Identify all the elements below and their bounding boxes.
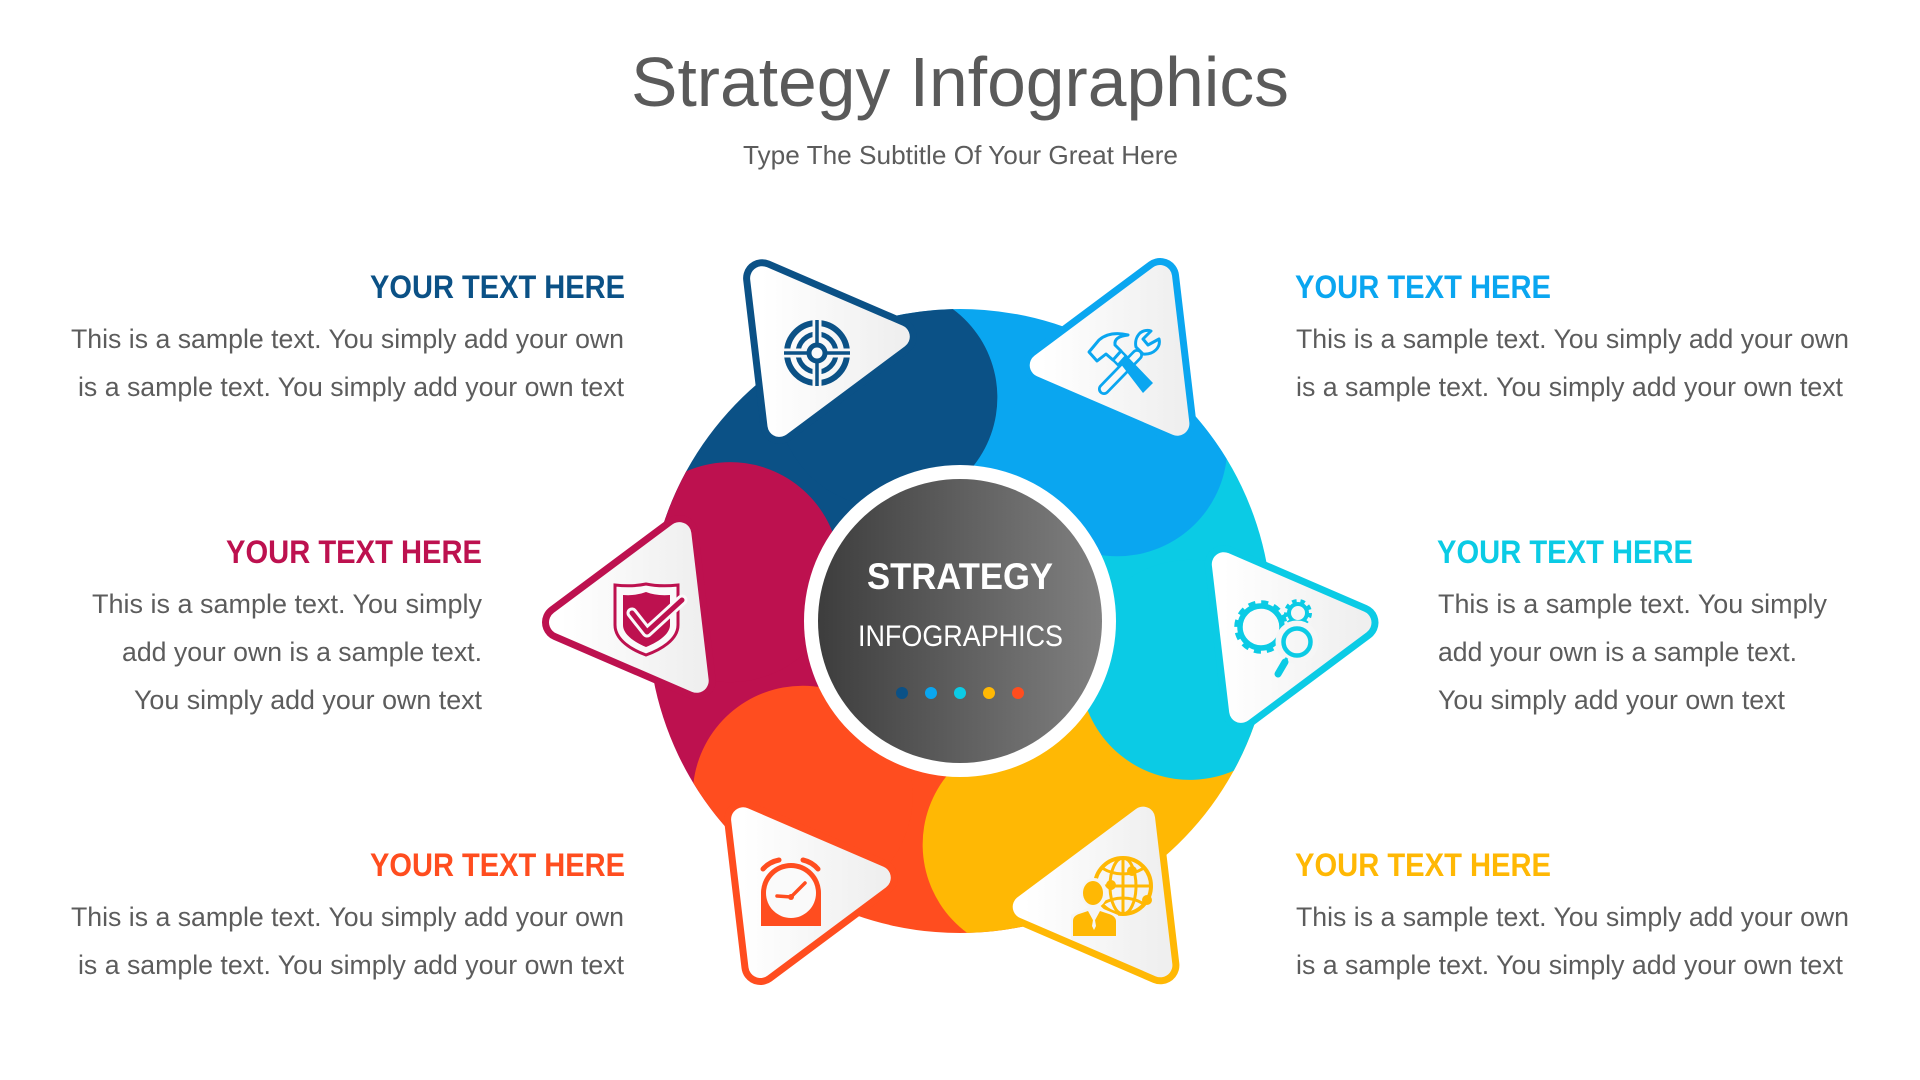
text block: crimson middle left [92, 534, 482, 715]
text block: cyan middle right: add your own is a sample text. [1438, 637, 1797, 667]
icon: shield with check [615, 584, 682, 655]
title: Strategy Infographics [631, 43, 1289, 121]
triangle: orange clock [743, 819, 879, 966]
wheel of six overlapping segments [648, 309, 1272, 933]
triangle: crimson shield [561, 534, 697, 681]
icon: hammer and wrench [1089, 330, 1159, 393]
text block: yellow bottom right: is a sample text. You simply add your own text [1296, 950, 1843, 980]
icon: target [784, 320, 850, 386]
text block: light blue top right: YOUR TEXT HERE [1295, 269, 1551, 305]
text block: light blue top right: This is a sample text. You simply add your own [1296, 324, 1849, 354]
text block: cyan middle right: YOUR TEXT HERE [1437, 534, 1693, 570]
text block: light blue top right: is a sample text. You simply add your own text [1296, 372, 1843, 402]
text block: navy top left: is a sample text. You simply add your own text [78, 372, 624, 402]
text block: yellow bottom right [1295, 847, 1849, 980]
text block: cyan middle right: You simply add your own text [1438, 685, 1785, 715]
text block: yellow bottom right: YOUR TEXT HERE [1295, 847, 1551, 883]
icon: alarm clock [761, 860, 821, 926]
text block: cyan middle right [1437, 534, 1827, 715]
text block: cyan middle right: This is a sample text. You simply [1438, 589, 1827, 619]
text block: crimson middle left: This is a sample text. You simply [92, 589, 482, 619]
icon: person with globe [1071, 858, 1152, 940]
text block: orange bottom left: This is a sample text. You simply add your own [71, 902, 624, 932]
text block: crimson middle left: add your own is a sample text. [122, 637, 482, 667]
segment: light blue [864, 309, 1227, 621]
center heading: STRATEGY [867, 556, 1053, 597]
colour dots [896, 687, 1024, 699]
center circle [804, 465, 1116, 777]
subtitle: Type The Subtitle Of Your Great Here [743, 140, 1178, 170]
text block: navy top left: This is a sample text. You simply add your own [71, 324, 624, 354]
segment: navy [655, 309, 997, 621]
text block: navy top left [71, 269, 625, 402]
segment: yellow [923, 621, 1265, 933]
segment: orange [693, 621, 1056, 933]
text block: navy top left: YOUR TEXT HERE [370, 269, 625, 305]
segment: crimson [648, 462, 960, 853]
triangle: light blue tools [1042, 277, 1177, 424]
icon: gears and magnifier [1236, 601, 1315, 674]
triangle: cyan gears [1224, 564, 1360, 711]
center subheading: INFOGRAPHICS [858, 620, 1063, 653]
triangle: navy target [762, 278, 898, 425]
center dark disc [818, 479, 1102, 763]
text block: orange bottom left [71, 847, 625, 980]
segment: cyan [960, 389, 1272, 780]
triangle: yellow globe [1025, 819, 1160, 965]
text block: light blue top right [1295, 269, 1849, 402]
text block: orange bottom left: YOUR TEXT HERE [370, 847, 625, 883]
text block: crimson middle left: YOUR TEXT HERE [226, 534, 482, 570]
text block: orange bottom left: is a sample text. You simply add your own text [78, 950, 624, 980]
text block: crimson middle left: You simply add your own text [134, 685, 482, 715]
center white ring [804, 465, 1116, 777]
segment overlap: crimson lobe above navy [648, 462, 840, 682]
text block: yellow bottom right: This is a sample text. You simply add your own [1296, 902, 1849, 932]
